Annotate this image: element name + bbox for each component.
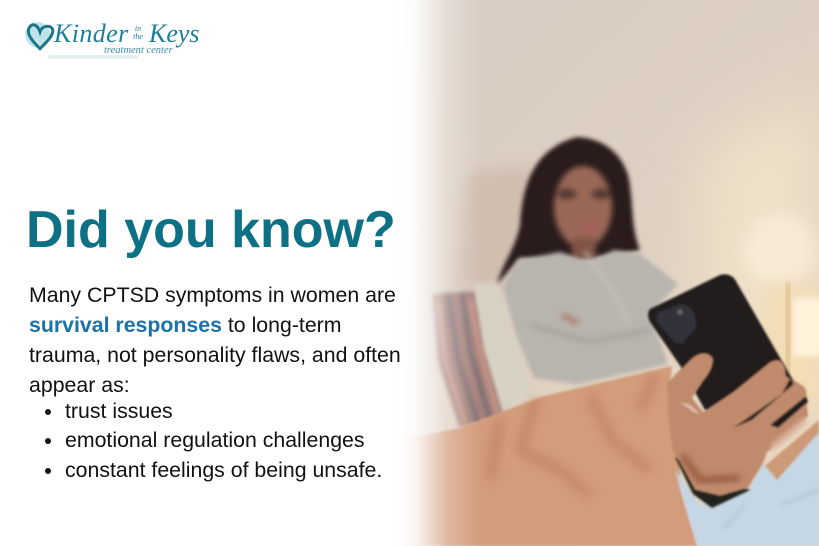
- icon: heart logo mark: [25, 22, 54, 51]
- face: [554, 166, 612, 260]
- wall shadow behind woman: [450, 165, 535, 295]
- dark gaps between fingers: [733, 378, 794, 428]
- logo small words: in: [135, 24, 141, 33]
- hair: [497, 137, 640, 284]
- lamp glow: [744, 214, 819, 405]
- phone: [648, 274, 806, 424]
- bullet: feeling unsafe: constant feelings of being unsafe.: [65, 458, 382, 482]
- body paragraph: Many CPTSD symptoms in women are: [29, 283, 396, 307]
- logo small words: the: [133, 32, 143, 41]
- logo wordmark: Kinder: [54, 19, 129, 48]
- wall right warm tone: [700, 90, 819, 420]
- logo decorative keys: [48, 55, 138, 59]
- bullet: emotional regulation: emotional regulation challenges: [65, 428, 365, 452]
- hand: [667, 353, 808, 496]
- bullet list: [45, 399, 382, 482]
- ring finger highlight: [772, 420, 806, 448]
- thumb nail reflection: [680, 402, 700, 414]
- logo: [25, 19, 200, 59]
- logo wordmark second part: Keys: [149, 19, 200, 48]
- body paragraph: survival responses to long-term: [29, 313, 342, 337]
- sweater shading and folded arm: [530, 252, 650, 342]
- blanket folds: [490, 375, 655, 495]
- striped pillow: [432, 291, 505, 428]
- dark cuff: [675, 457, 750, 508]
- palm and thumb: [667, 353, 808, 496]
- title: Did you know?: [26, 201, 396, 259]
- body paragraph: [29, 283, 401, 397]
- grey sweater: [503, 250, 678, 384]
- wall: [380, 0, 819, 546]
- body paragraph: trauma, not personality flaws, and often: [29, 343, 401, 367]
- bullet: trust issues: trust issues: [65, 399, 173, 423]
- shirt sleeve: [675, 432, 819, 546]
- blanket: [396, 366, 698, 546]
- white pillow: [474, 282, 532, 414]
- logo small words: [133, 24, 143, 41]
- blanket behind hand: [760, 420, 819, 482]
- logo tagline: treatment center: [104, 45, 173, 56]
- body paragraph: appear as:: [29, 373, 130, 397]
- white fade over photo edge: [397, 0, 480, 546]
- sleeve shading: [722, 490, 819, 530]
- palm shadow: [682, 455, 740, 480]
